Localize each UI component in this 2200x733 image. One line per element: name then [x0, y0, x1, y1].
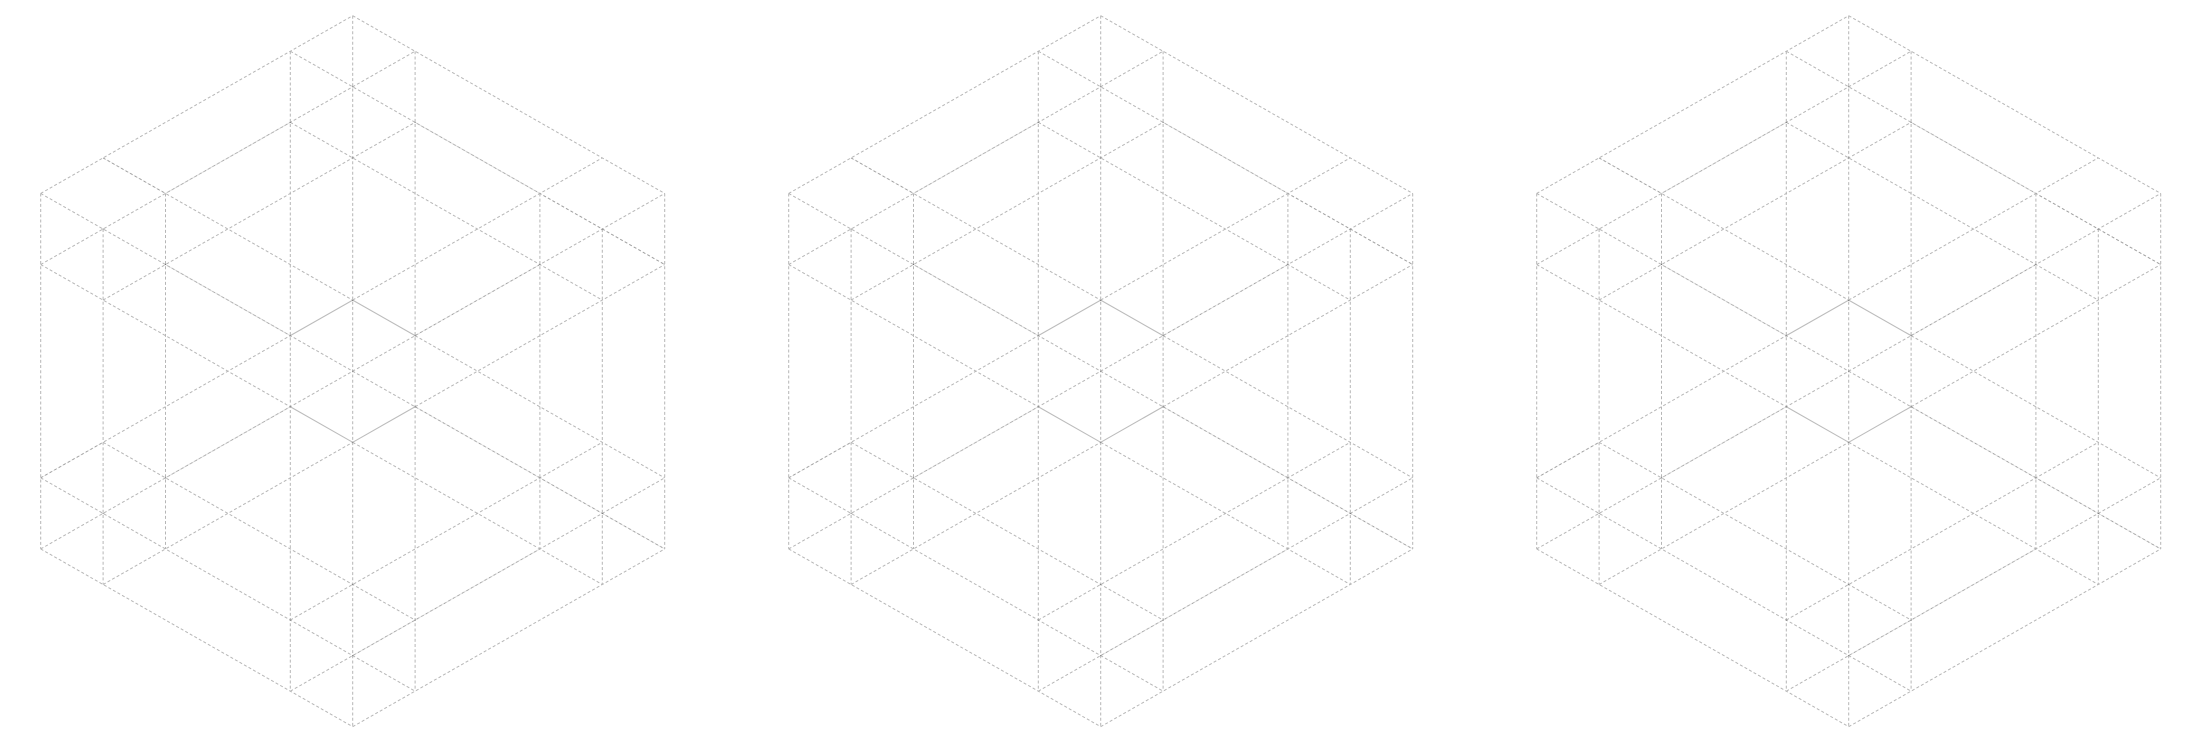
descending diagonal dashed lines: [41, 16, 665, 727]
vertex dots: [851, 86, 1351, 656]
descending diagonal dashed lines: [789, 16, 1413, 727]
ascending diagonal dashed lines: [41, 16, 665, 727]
vertical dashed lines: [1537, 16, 2161, 727]
descending diagonal dashed lines: [1537, 16, 2161, 727]
panel: right isometric hexagon grid: [1537, 16, 2161, 727]
ascending diagonal dashed lines: [1537, 16, 2161, 727]
panel: middle isometric hexagon grid: [789, 16, 1413, 727]
overlapped darker dashed segments: [789, 122, 1413, 656]
vertex dots: [103, 86, 603, 656]
center rhombus solid edges: [1786, 300, 1911, 442]
panel: left isometric hexagon grid: [41, 16, 665, 727]
overlapped darker dashed segments: [1537, 122, 2161, 656]
vertical dashed lines: [41, 16, 665, 727]
center rhombus solid edges: [1038, 300, 1163, 442]
ascending diagonal dashed lines: [789, 16, 1413, 727]
vertical dashed lines: [789, 16, 1413, 727]
vertex dots: [1599, 86, 2099, 656]
overlapped darker dashed segments: [41, 122, 665, 656]
center rhombus solid edges: [290, 300, 415, 442]
